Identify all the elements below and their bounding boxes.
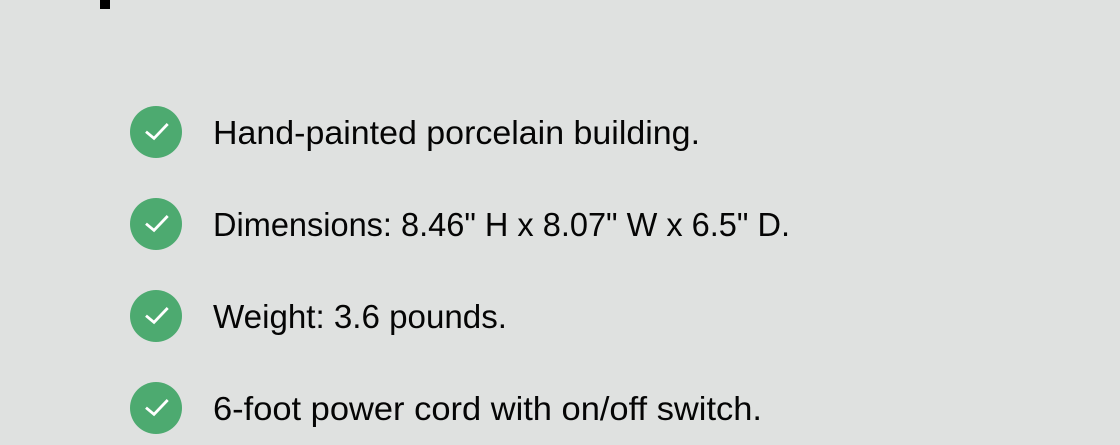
feature row: dimensions — [130, 198, 790, 250]
feature row: power cord — [130, 382, 762, 434]
icon: check badge — [130, 290, 182, 342]
feature row: weight — [130, 290, 507, 342]
feature text: Weight: 3.6 pounds. — [213, 298, 507, 335]
icon: check badge — [130, 382, 182, 434]
feature text: Hand-painted porcelain building. — [213, 114, 700, 151]
icon: check badge — [130, 198, 182, 250]
feature text: 6-foot power cord with on/off switch. — [213, 390, 762, 427]
feature list — [130, 106, 790, 434]
feature text: Dimensions: 8.46" H x 8.07" W x 6.5" D. — [213, 206, 790, 243]
cropped heading descender — [100, 0, 110, 9]
icon: check badge — [130, 106, 182, 158]
feature row: porcelain building — [130, 106, 700, 158]
